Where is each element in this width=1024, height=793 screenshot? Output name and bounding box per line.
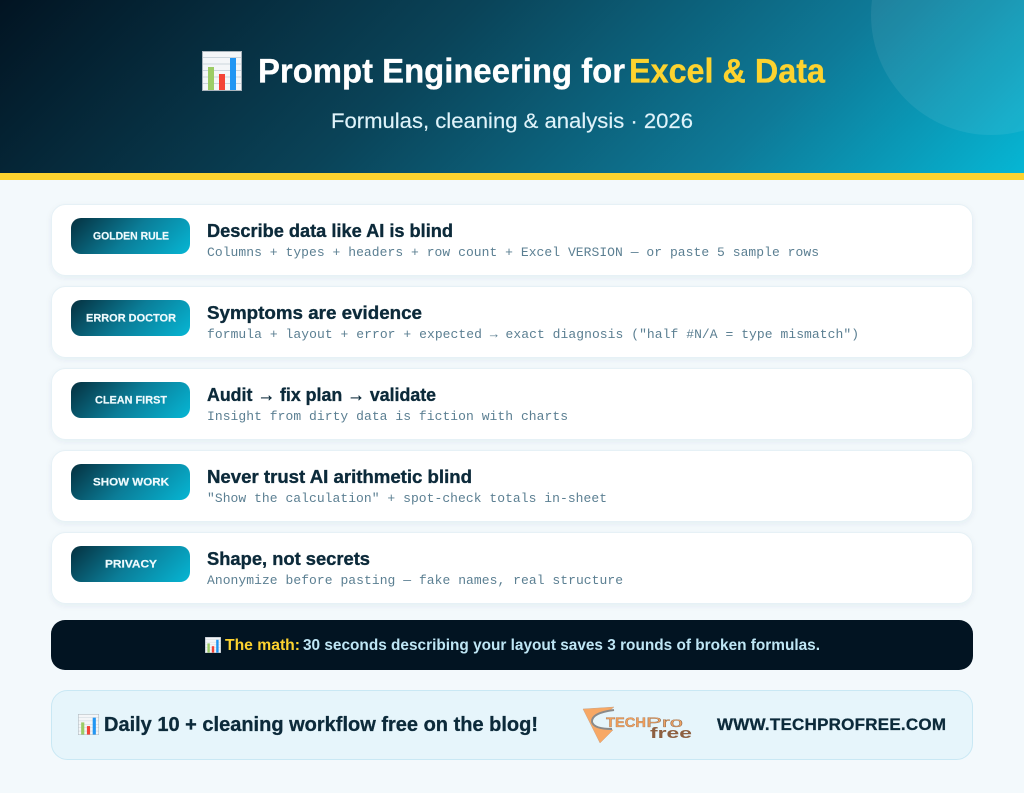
text: error doctor detail: formula + layout + error + expected → exact diagnosis ("half #N/A = type mismatch") (207, 327, 859, 342)
logo: TechPro free: TECH (606, 714, 646, 730)
badge: privacy: PRIVACY (105, 558, 158, 570)
heading: golden rule: Describe data like AI is blind (207, 220, 453, 241)
panel: call to action (52, 690, 972, 760)
text: golden rule detail: Columns + types + headers + row count + Excel VERSION — or paste 5 sample rows (207, 245, 819, 260)
badge: golden rule (71, 218, 190, 254)
panel: show work (52, 450, 972, 522)
heading: show work: Never trust AI arithmetic blind (207, 466, 472, 487)
badge: golden rule: GOLDEN RULE (93, 230, 169, 242)
icon: bar chart (202, 52, 242, 90)
heading: privacy: Shape, not secrets (207, 548, 370, 569)
badge: show work (71, 464, 190, 500)
panel: clean first (52, 368, 972, 440)
text: privacy detail: Anonymize before pasting — fake names, real structure (207, 573, 623, 588)
subtitle: Formulas, cleaning & analysis · 2026 (331, 109, 693, 133)
icon: small bar chart (205, 637, 221, 653)
badge: error doctor (71, 300, 190, 336)
panel: privacy (52, 532, 972, 604)
callout text: 30 seconds describing your layout saves 3 rounds of broken formulas. (303, 637, 820, 654)
heading: clean first: Audit → fix plan → validate (207, 384, 436, 405)
badge: error doctor: ERROR DOCTOR (86, 312, 176, 324)
callout label: The math: (225, 637, 300, 654)
panel: error doctor (52, 286, 972, 358)
header banner (0, 0, 1024, 180)
logo: TechPro free: Pro (646, 714, 683, 730)
panel: golden rule (52, 204, 972, 276)
call to action text: Daily 10 + cleaning workflow free on the blog! (104, 713, 538, 736)
logo: TechPro free: free (650, 725, 692, 742)
logo: TechPro free (583, 707, 692, 743)
badge: clean first: CLEAN FIRST (95, 394, 167, 406)
title: Prompt Engineering for (258, 52, 625, 90)
badge: show work: SHOW WORK (93, 476, 169, 488)
text: clean first detail: Insight from dirty data is fiction with charts (207, 409, 568, 424)
callout: the math (51, 620, 973, 670)
website address: WWW.TECHPROFREE.COM (717, 715, 946, 734)
heading: error doctor: Symptoms are evidence (207, 302, 422, 323)
title highlight: Excel & Data (629, 52, 826, 90)
badge: privacy (71, 546, 190, 582)
text: show work detail: "Show the calculation" + spot-check totals in-sheet (207, 491, 607, 506)
icon: bar chart (78, 714, 99, 735)
badge: clean first (71, 382, 190, 418)
